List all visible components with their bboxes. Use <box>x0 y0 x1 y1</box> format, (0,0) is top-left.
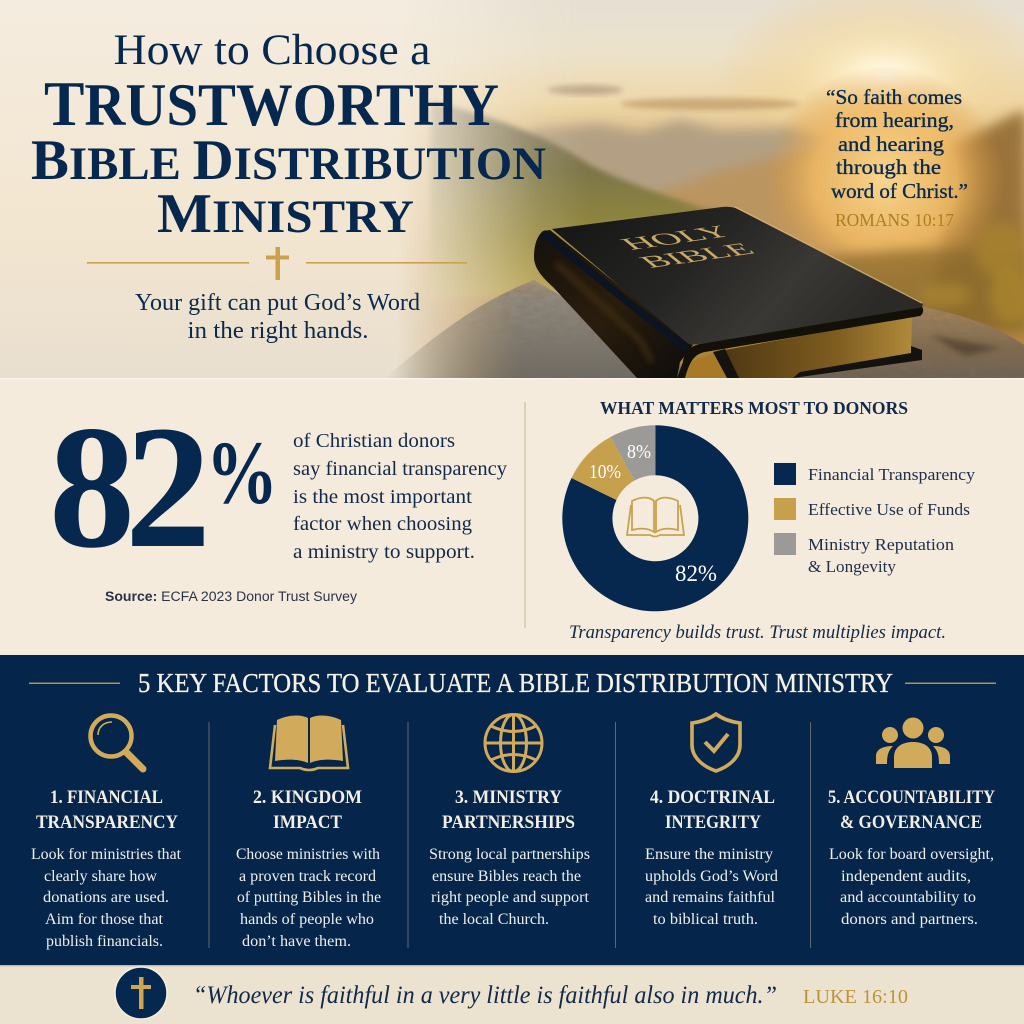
subtitle: in the right hands. <box>188 318 368 344</box>
big statistic 82% <box>49 390 278 585</box>
title: MINISTRY <box>157 183 414 245</box>
donut chart: 82% <box>675 561 717 586</box>
description: ensure Bibles reach the <box>432 868 581 885</box>
panel: five key factors <box>0 655 1024 966</box>
heading: 1. FINANCIAL <box>50 787 163 808</box>
description: Strong local partnerships <box>429 846 590 863</box>
big statistic 82%: 2 <box>125 390 211 585</box>
description: to biblical truth. <box>653 911 758 928</box>
description: donors and partners. <box>841 911 978 928</box>
title: TRUSTWORTHY <box>44 68 499 139</box>
description: don’t have them. <box>242 933 351 950</box>
footer verse: “Whoever is faithful in a very little is faithful also in much.” <box>193 982 777 1009</box>
subtitle: Your gift can put God’s Word <box>135 290 420 316</box>
heading: INTEGRITY <box>665 812 761 833</box>
description: Aim for those that <box>45 911 164 928</box>
panel: statistics <box>0 378 1024 655</box>
icon: shield with check <box>692 714 740 771</box>
description: Look for ministries that <box>31 846 182 863</box>
description: independent audits, <box>841 868 971 885</box>
big statistic 82%: 8 <box>49 390 135 585</box>
description <box>829 846 994 928</box>
vegetation on right <box>919 222 1024 324</box>
heading: 3. MINISTRY <box>455 787 562 808</box>
factor 4: doctrinal integrity <box>645 714 778 928</box>
description: Choose ministries with <box>236 846 380 863</box>
section heading: 5 KEY FACTORS TO EVALUATE A BIBLE DISTRIBUTION MINISTRY <box>138 668 893 698</box>
heading <box>253 787 362 833</box>
donut chart: 8% <box>627 441 651 463</box>
scripture quote: Romans 10:17: “So faith comes <box>826 85 962 109</box>
icon: open book <box>270 716 348 770</box>
description <box>429 846 590 928</box>
description: upholds God’s Word <box>645 868 778 885</box>
description: publish financials. <box>46 933 163 950</box>
heading <box>650 787 775 833</box>
heading: 5. ACCOUNTABILITY <box>828 787 995 808</box>
statistic description <box>293 430 507 563</box>
heading: TRANSPARENCY <box>36 812 178 833</box>
statistic description: is the most important <box>293 486 472 508</box>
factor 5: accountability and governance <box>828 718 995 928</box>
description: Look for board oversight, <box>829 846 994 863</box>
icon: magnifying glass <box>90 716 143 769</box>
description: the local Church. <box>439 911 549 928</box>
heading: 2. KINGDOM <box>253 787 362 808</box>
description: donations are used. <box>43 889 169 906</box>
icon: globe <box>485 714 542 772</box>
scripture quote: Romans 10:17: through the <box>836 155 941 179</box>
statistic description: say financial transparency <box>293 458 507 480</box>
factor 1: financial transparency <box>31 716 182 950</box>
footer verse reference: LUKE 16:10 <box>803 986 908 1008</box>
factor 3: ministry partnerships <box>429 714 590 928</box>
heading: 4. DOCTRINAL <box>650 787 775 808</box>
icon: open book <box>627 498 684 536</box>
donut chart: 10% <box>589 461 621 483</box>
title: BIBLE DISTRIBUTION <box>31 129 546 192</box>
statistic description: factor when choosing <box>293 513 472 535</box>
scripture quote: Romans 10:17: word of Christ.” <box>831 179 968 203</box>
left cream fade <box>0 0 570 378</box>
heading <box>828 787 995 833</box>
divider with cross <box>87 247 467 280</box>
statistic description: a ministry to support. <box>293 541 475 563</box>
title <box>31 27 546 245</box>
description: and accountability to <box>840 889 976 906</box>
chart legend: & Longevity <box>808 557 896 576</box>
description: of putting Bibles in the <box>237 889 381 906</box>
description <box>645 846 778 928</box>
description: Ensure the ministry <box>645 846 773 863</box>
source note: Source: ECFA 2023 Donor Trust Survey <box>105 589 357 604</box>
icon: cross badge <box>115 967 167 1019</box>
factor 2: kingdom impact <box>236 716 381 950</box>
heading: & GOVERNANCE <box>840 812 982 833</box>
donut chart <box>562 425 748 611</box>
description <box>31 846 182 950</box>
big statistic 82%: % <box>206 424 278 523</box>
footer quote band <box>0 965 1024 1024</box>
chart legend: Financial Transparency <box>808 465 976 484</box>
description: hands of people who <box>240 911 374 928</box>
description: a proven track record <box>239 868 376 885</box>
scripture quote: Romans 10:17: from hearing, <box>835 108 954 132</box>
hero photo background <box>0 0 1024 378</box>
scripture quote: Romans 10:17: and hearing <box>838 132 945 156</box>
chart caption: Transparency builds trust. Trust multiplies impact. <box>569 622 946 643</box>
description: and remains faithful <box>645 889 776 906</box>
description <box>236 846 381 950</box>
description: clearly share how <box>44 868 157 885</box>
description: right people and support <box>431 889 590 906</box>
icon: group of people <box>876 718 950 768</box>
heading: PARTNERSHIPS <box>442 812 575 833</box>
scripture quote: Romans 10:17: ROMANS 10:17 <box>835 210 954 230</box>
icon: holy bible book: BIBLE <box>633 240 761 272</box>
icon: holy bible book <box>534 207 923 378</box>
heading: IMPACT <box>273 812 342 833</box>
stone ledge <box>394 280 1024 378</box>
title: How to Choose a <box>114 27 430 74</box>
subtitle <box>135 290 420 344</box>
chart legend <box>774 463 976 576</box>
chart legend: Effective Use of Funds <box>808 500 970 519</box>
chart legend: Ministry Reputation <box>808 535 955 554</box>
heading <box>442 787 575 833</box>
scripture quote: Romans 10:17 <box>826 85 968 230</box>
chart heading: WHAT MATTERS MOST TO DONORS <box>600 398 908 418</box>
statistic description: of Christian donors <box>293 430 455 452</box>
book cover lettering: HOLY <box>614 222 738 254</box>
heading <box>36 787 178 833</box>
